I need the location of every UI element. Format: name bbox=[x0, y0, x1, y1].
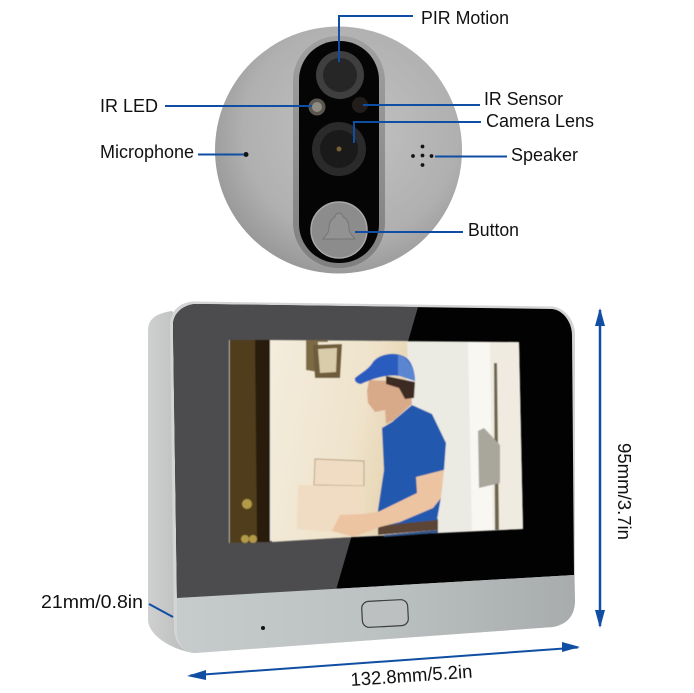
icon: speaker holes bbox=[411, 145, 433, 167]
arm bbox=[332, 470, 444, 537]
cardboard boxes bbox=[297, 459, 365, 532]
far right wall bbox=[490, 342, 523, 530]
label: PIR Motion: PIR Motion bbox=[421, 7, 509, 28]
pale right wall strip bbox=[468, 342, 493, 531]
hair bbox=[386, 376, 415, 399]
leader lines bbox=[165, 16, 507, 232]
black screen face bbox=[173, 304, 574, 598]
mailbox bbox=[478, 428, 500, 488]
wall lamp bbox=[306, 340, 342, 378]
mailbox pole bbox=[494, 363, 499, 530]
grey screen reflection bbox=[173, 304, 418, 598]
door handles bbox=[241, 499, 257, 543]
icon: IR LED bbox=[308, 98, 326, 116]
label: Speaker: Speaker bbox=[511, 144, 578, 165]
icon: camera lens bbox=[312, 122, 366, 176]
icon: bell button bbox=[311, 202, 367, 258]
neck and face bbox=[367, 380, 412, 424]
cap back panel bbox=[398, 355, 415, 381]
label: IR LED: IR LED bbox=[100, 95, 158, 116]
blue shirt bbox=[378, 405, 446, 526]
dimension label: depth: 21mm/0.8in bbox=[41, 591, 143, 612]
dimension arrow: height bbox=[595, 308, 605, 628]
warm wall shading bbox=[270, 340, 408, 542]
trousers and belt bbox=[378, 519, 438, 537]
photo: delivery man at door bbox=[229, 340, 523, 543]
label: Camera Lens: Camera Lens bbox=[486, 110, 594, 131]
icon: microphone hole bbox=[244, 152, 248, 157]
dimension label: height: 95mm/3.7in bbox=[614, 443, 635, 540]
dimension line: depth bbox=[149, 604, 173, 617]
doorbell unit bbox=[215, 26, 462, 274]
monitor front silver body bbox=[170, 302, 575, 653]
label: IR Sensor: IR Sensor bbox=[484, 88, 563, 109]
icon: PIR motion lens bbox=[316, 51, 364, 99]
door bbox=[230, 340, 270, 543]
black pill panel bbox=[299, 41, 379, 263]
photo wall background bbox=[229, 340, 523, 543]
monitor unit bbox=[148, 302, 575, 653]
icon: IR sensor bbox=[352, 97, 368, 113]
monitor side edge bbox=[148, 311, 200, 653]
label: Microphone: Microphone bbox=[100, 141, 194, 162]
dimension arrow: width bbox=[187, 642, 580, 680]
doorbell front pill bbox=[293, 36, 385, 268]
blue cap bbox=[355, 354, 415, 384]
doorbell disc bbox=[215, 26, 462, 274]
home button bbox=[361, 599, 409, 628]
label: Button: Button bbox=[468, 219, 519, 240]
indicator dot bbox=[261, 626, 265, 630]
door frame bbox=[255, 340, 270, 542]
dimension label: width: 132.8mm/5.2in bbox=[350, 661, 473, 690]
silver lower bezel bbox=[177, 575, 575, 653]
